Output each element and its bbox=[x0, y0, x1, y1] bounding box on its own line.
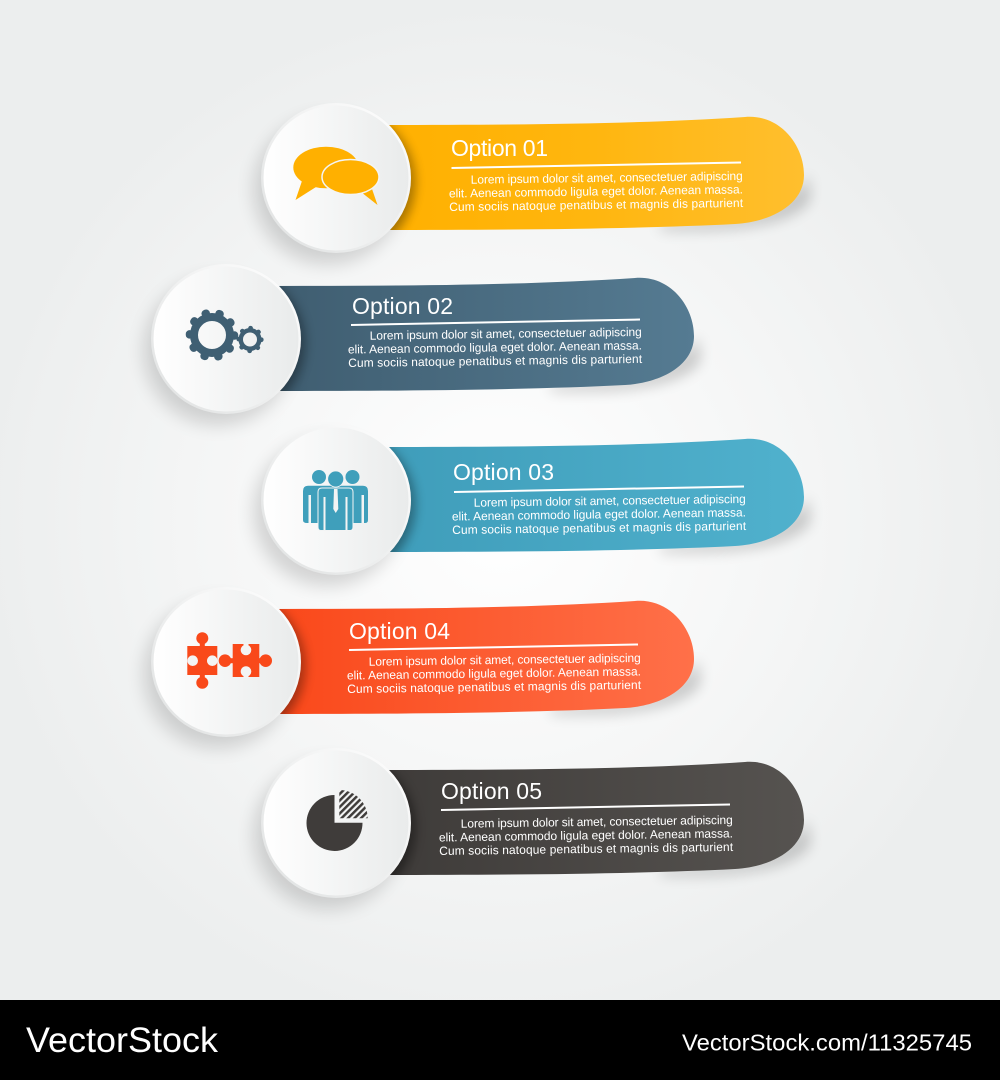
panel: option 04 bbox=[144, 587, 700, 748]
banner shadow from circle 01 bbox=[389, 125, 422, 230]
icon: puzzle pieces bbox=[187, 632, 272, 689]
text block 01: Cum sociis natoque penatibus et magnis dis parturient bbox=[449, 196, 744, 214]
panel: option 05 bbox=[254, 748, 810, 909]
banner 04 bbox=[275, 601, 694, 714]
footer logo: VectorStock bbox=[26, 1021, 219, 1060]
text block 02: Cum sociis natoque penatibus et magnis dis parturient bbox=[348, 352, 643, 370]
rule 05 bbox=[441, 804, 730, 810]
text block 03: elit. Aenean commodo ligula eget dolor. Aenean massa. bbox=[452, 505, 746, 523]
text block 05: elit. Aenean commodo ligula eget dolor. Aenean massa. bbox=[439, 826, 733, 844]
banner shadow from circle 02 bbox=[280, 286, 310, 391]
text block 02: elit. Aenean commodo ligula eget dolor. Aenean massa. bbox=[348, 338, 642, 356]
icon: gears bbox=[190, 312, 262, 358]
text block 03: Lorem ipsum dolor sit amet, consectetuer adipiscing bbox=[474, 492, 746, 510]
circle 05 bbox=[261, 748, 411, 898]
banner shadow from circle 05 bbox=[390, 770, 418, 875]
circle 01 bbox=[261, 103, 411, 253]
banner shadow from circle 03 bbox=[389, 447, 421, 552]
text block 04 bbox=[347, 651, 642, 696]
text block 02: Lorem ipsum dolor sit amet, consectetuer adipiscing bbox=[370, 325, 642, 343]
panel: option 01 bbox=[254, 103, 810, 264]
banner 02 bbox=[275, 278, 694, 391]
icon: team of people bbox=[303, 470, 368, 531]
rule 02 bbox=[351, 320, 640, 325]
text block 05: Cum sociis natoque penatibus et magnis dis parturient bbox=[439, 840, 734, 858]
panel: option 02 bbox=[144, 264, 700, 425]
rule 04 bbox=[349, 644, 638, 650]
text block 02 bbox=[348, 325, 643, 370]
footer url: VectorStock.com/11325745 bbox=[682, 1030, 972, 1056]
text block 01: elit. Aenean commodo ligula eget dolor. Aenean massa. bbox=[449, 182, 743, 200]
text block 01 bbox=[449, 169, 744, 214]
text block 05: Lorem ipsum dolor sit amet, consectetuer adipiscing bbox=[461, 813, 733, 831]
text block 05 bbox=[439, 813, 734, 858]
circle shadow 05 bbox=[254, 761, 402, 909]
circle shadow 03 bbox=[254, 438, 402, 586]
text block 04: Lorem ipsum dolor sit amet, consectetuer adipiscing bbox=[369, 651, 641, 669]
banner shadow from circle 04 bbox=[279, 609, 312, 714]
icon: speech bubbles bbox=[293, 147, 379, 205]
heading 05: Option 05 bbox=[441, 778, 542, 804]
footer bar bbox=[0, 1000, 1000, 1080]
circle 02 bbox=[151, 264, 301, 414]
icon: pie chart bbox=[307, 790, 368, 851]
text block 01: Lorem ipsum dolor sit amet, consectetuer adipiscing bbox=[471, 169, 743, 187]
circle shadow 01 bbox=[254, 116, 402, 264]
text block 03: Cum sociis natoque penatibus et magnis dis parturient bbox=[452, 519, 747, 537]
heading 01: Option 01 bbox=[451, 135, 548, 161]
heading 02: Option 02 bbox=[352, 293, 453, 319]
panel: option 03 bbox=[254, 425, 810, 586]
circle 04 bbox=[151, 587, 301, 737]
banner 05 bbox=[385, 762, 804, 875]
text block 03 bbox=[452, 492, 747, 537]
rule 01 bbox=[452, 162, 741, 168]
text block 04: Cum sociis natoque penatibus et magnis dis parturient bbox=[347, 678, 642, 696]
circle shadow 02 bbox=[144, 277, 292, 425]
text block 04: elit. Aenean commodo ligula eget dolor. Aenean massa. bbox=[347, 664, 641, 682]
rule 03 bbox=[454, 486, 744, 492]
circle 03 bbox=[261, 425, 411, 575]
heading 04: Option 04 bbox=[349, 618, 450, 644]
banner 01 bbox=[385, 117, 804, 230]
banner 03 bbox=[385, 439, 804, 552]
circle shadow 04 bbox=[144, 600, 292, 748]
heading 03: Option 03 bbox=[453, 459, 554, 485]
